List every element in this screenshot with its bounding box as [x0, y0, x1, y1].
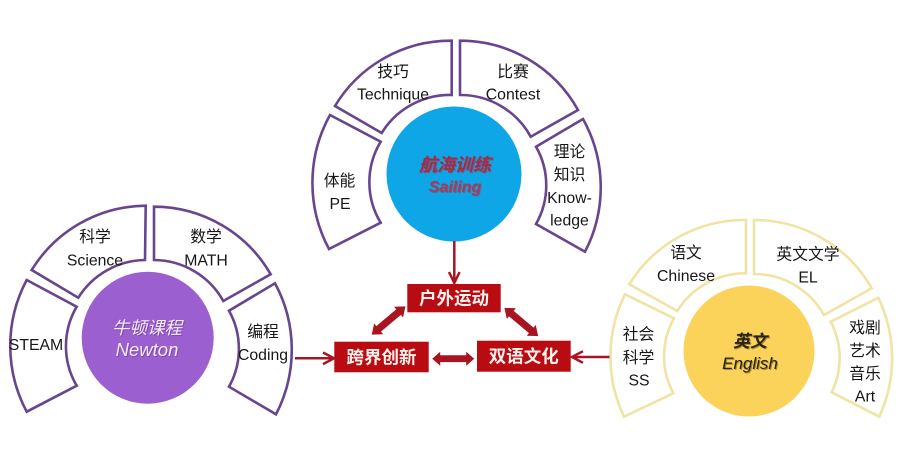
segment: Art: 音乐: [849, 365, 881, 383]
circle: English: English: [722, 354, 778, 373]
box: Outdoor sports: [407, 284, 501, 312]
segment: MATH: MATH: [184, 252, 228, 270]
circle: Sailing: Sailing: [430, 180, 482, 197]
segment: Technique: 技巧: [377, 63, 409, 81]
segment: Knowledge: [536, 119, 601, 252]
segment: Coding: Coding: [238, 347, 288, 364]
circle: English: English: [723, 355, 779, 374]
box: Bilingual culture: [477, 341, 571, 372]
circle: Sailing: [386, 106, 522, 242]
segment: EL: 英文文学: [776, 246, 840, 264]
arrow: outdoor sports and bilingual culture: [500, 302, 543, 342]
segment: STEAM: [9, 280, 77, 412]
arrow: innovation and bilingual culture: [432, 352, 474, 366]
circle: Newton: 牛顿课程: [112, 318, 184, 338]
box: Bilingual culture: 双语文化: [489, 346, 559, 366]
circle: English: [684, 286, 814, 416]
segment: STEAM: STEAM: [9, 337, 63, 354]
arrow: English to bilingual culture: [572, 351, 610, 363]
segment: Science: 科学: [79, 228, 111, 246]
circle: Sailing: 航海训练: [419, 155, 494, 175]
segment: Art: Art: [855, 388, 876, 406]
segment: Technique: Technique: [357, 86, 429, 104]
circle: Sailing: Sailing: [429, 179, 481, 196]
circle: Newton: Newton: [116, 339, 178, 360]
circle: Newton: Newton: [117, 340, 179, 361]
segment: Technique: [335, 41, 452, 133]
segment: Coding: 编程: [247, 323, 279, 341]
segment: Knowledge: Know-: [547, 190, 592, 207]
box: Cross-disciplinary innovation: [334, 342, 429, 372]
segment: Chinese: [629, 220, 746, 311]
segment: PE: [312, 115, 381, 249]
circle: English: 英文: [733, 332, 770, 351]
segment: Coding: [229, 283, 292, 414]
segment: Chinese: 语文: [670, 244, 702, 262]
segment: Chinese: Chinese: [657, 268, 715, 285]
segment: Knowledge: ledge: [550, 212, 589, 230]
segment: MATH: 数学: [190, 228, 222, 246]
segment: EL: [754, 220, 872, 315]
segment: Contest: [460, 41, 578, 137]
arrow: outdoor sports and innovation: [367, 301, 410, 340]
segment: Art: 艺术: [849, 342, 881, 360]
arrow: Sailing to outdoor sports: [449, 241, 460, 283]
arrow: Newton to innovation: [295, 352, 334, 364]
segment: EL: EL: [798, 270, 818, 286]
segment: Art: [831, 298, 892, 417]
segment: Science: Science: [67, 252, 123, 270]
segment: SS: SS: [628, 372, 650, 390]
segment: Art: 戏剧: [849, 319, 881, 337]
segment: Knowledge: 知识: [554, 166, 585, 184]
cluster: English: [610, 220, 892, 417]
circle: Newton: [82, 272, 214, 404]
segment: SS: 科学: [623, 349, 654, 367]
segment: Knowledge: 理论: [554, 143, 585, 161]
segment: PE: 体能: [324, 172, 355, 190]
circle: English: 英文: [734, 333, 771, 352]
segment: SS: [610, 294, 674, 417]
box: Outdoor sports: 户外运动: [419, 288, 489, 308]
segment: PE: PE: [329, 196, 351, 213]
circle: Newton: 牛顿课程: [113, 319, 185, 339]
cluster: Sailing: [312, 41, 601, 252]
segment: SS: 社会: [623, 326, 654, 344]
segment: MATH: [154, 207, 271, 301]
segment: Contest: 比赛: [497, 62, 529, 81]
segment: Contest: Contest: [486, 86, 541, 104]
circle: Sailing: 航海训练: [420, 156, 495, 176]
box: Cross-disciplinary innovation: 跨界创新: [346, 347, 416, 367]
cluster: Newton: [9, 206, 292, 414]
segment: Science: [32, 206, 146, 298]
